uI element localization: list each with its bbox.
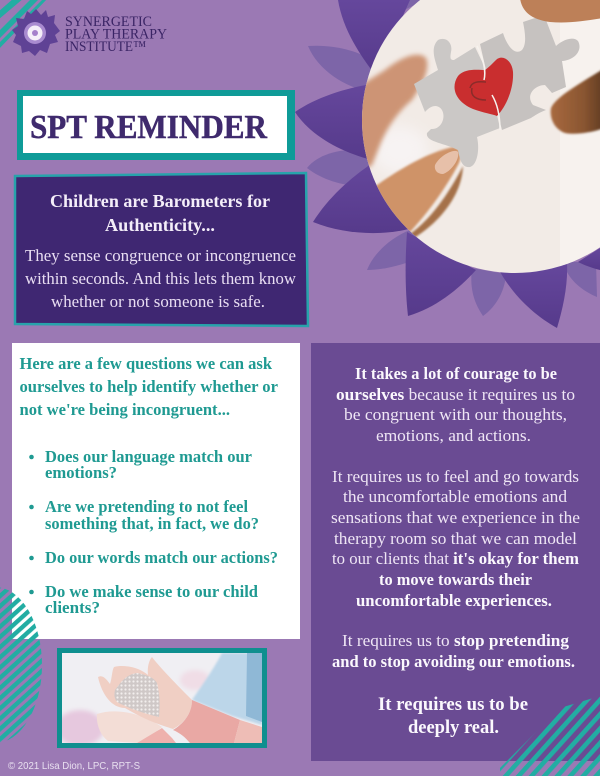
hand: upper right finger: [520, 0, 600, 23]
title banner: [17, 90, 295, 160]
heart: [454, 58, 513, 116]
sweater cuff: [234, 720, 262, 743]
panel body: [25, 246, 297, 311]
paragraph 3: [332, 631, 575, 671]
photo background: [360, 0, 600, 275]
logo: [12, 9, 167, 56]
panel heading: Children are Barometers for: [50, 191, 270, 211]
paragraph 1: It takes a lot of courage to be: [355, 364, 557, 383]
puzzle piece: right: [480, 15, 580, 130]
paragraph 2: the uncomfortable emotions and: [343, 487, 568, 506]
sweater: [173, 700, 240, 743]
flower petals behind photo: [295, 0, 600, 328]
paragraph 1: [336, 364, 575, 445]
puzzle piece: left: [414, 39, 500, 167]
paragraph 2: to our clients that it's okay for them: [332, 549, 579, 568]
paragraph 1: ourselves because it requires us to: [336, 385, 575, 404]
panel: courage: [311, 343, 600, 761]
panel heading: [50, 191, 270, 235]
upper hand: [98, 657, 192, 729]
closing statement: deeply real.: [408, 718, 499, 738]
corner stripes: top left: [0, 0, 48, 50]
paragraph 1: emotions, and actions.: [376, 426, 531, 445]
photo: hands holding heart: [56, 648, 267, 748]
light petals: [307, 0, 597, 316]
bullet list: emotions?: [45, 463, 117, 482]
panel body: whether or not someone is safe.: [51, 292, 265, 311]
photo: hands joining puzzle pieces: [350, 0, 600, 280]
paragraph 1: be congruent with our thoughts,: [344, 405, 567, 424]
copyright: © 2021 Lisa Dion, LPC, RPT-S: [8, 761, 140, 772]
hand: lower thumb: [370, 147, 461, 232]
bullet list: something that, in fact, we do?: [45, 514, 259, 533]
panel body: within seconds. And this lets them know: [25, 269, 297, 288]
dark petals: [295, 0, 600, 328]
paragraph 2: uncomfortable experiences.: [356, 591, 552, 610]
panel: children are barometers: [15, 173, 308, 326]
logo text: INSTITUTE™: [65, 39, 146, 55]
bullet list: Does our language match our: [45, 447, 252, 466]
panel heading: Authenticity...: [105, 215, 215, 235]
hand: right thumb: [551, 68, 600, 134]
paragraph 2: therapy room so that we can model: [334, 529, 577, 548]
paragraph 2: [331, 467, 580, 610]
lower hand: [97, 711, 162, 743]
corner stripes: bottom right: [500, 696, 600, 776]
questions intro: Here are a few questions we can ask: [20, 354, 273, 373]
sleeve: blue: [192, 653, 262, 725]
bullet list: Do we make sense to our child: [45, 582, 259, 601]
heart: [114, 673, 160, 717]
bullet list: Are we pretending to not feel: [45, 497, 248, 516]
questions intro: [20, 354, 278, 419]
paragraph 3: It requires us to stop pretending: [342, 631, 570, 650]
paragraph 2: to move towards their: [379, 570, 532, 589]
bullet list: [29, 447, 278, 617]
paragraph 2: sensations that we experience in the: [331, 508, 580, 527]
bullet list: Do our words match our actions?: [45, 548, 278, 567]
closing statement: [378, 695, 528, 738]
logo text: SYNERGETIC: [65, 14, 152, 30]
puzzle seam: [482, 62, 500, 128]
title: SPT REMINDER: [30, 109, 268, 146]
panel: questions: [12, 343, 300, 639]
paragraph 2: It requires us to feel and go towards: [332, 467, 579, 486]
logo text: [65, 14, 167, 55]
questions intro: not we're being incongruent...: [20, 400, 230, 419]
closing statement: It requires us to be: [378, 695, 528, 715]
paragraph 3: and to stop avoiding our emotions.: [332, 652, 575, 671]
blurred cuff: [378, 130, 424, 170]
icon: logo flower: [12, 9, 60, 56]
questions intro: ourselves to help identify whether or: [20, 377, 278, 396]
panel body: They sense congruence or incongruence: [25, 246, 296, 265]
thumbnail: [435, 151, 458, 174]
bullet list: clients?: [45, 598, 100, 617]
logo text: PLAY THERAPY: [65, 26, 167, 42]
hand: left fingers: [362, 52, 430, 170]
corner stripes: bottom left: [0, 587, 42, 743]
